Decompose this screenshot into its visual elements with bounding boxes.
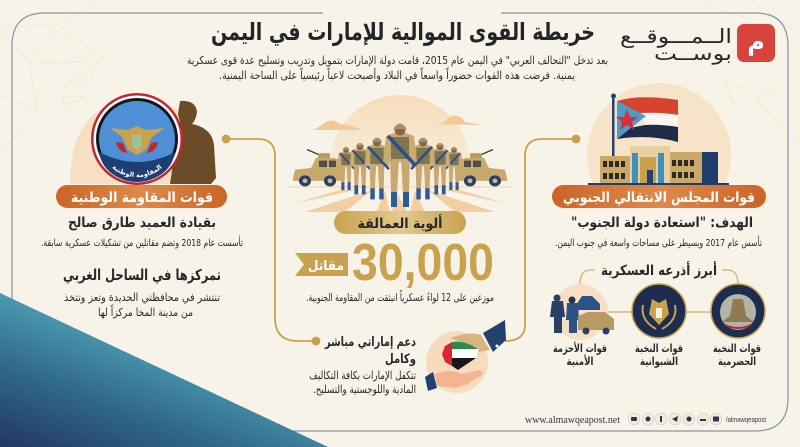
connector lines <box>222 136 580 344</box>
arms labels <box>553 341 761 368</box>
icon: hands with UAE flag <box>425 320 506 393</box>
UAE support text: تتكفل الإمارات بكافة التكاليف <box>309 369 416 382</box>
arms labels: الشبوانية <box>640 355 678 368</box>
emblem badge <box>91 93 183 185</box>
council text <box>555 215 762 249</box>
right illustration: flag and building <box>587 83 731 185</box>
arms labels: قوات النخبة <box>635 342 683 355</box>
logo: بوســت <box>654 43 732 65</box>
ribbon: fighters <box>295 253 348 276</box>
UAE support text: دعم إماراتي مباشر <box>324 335 416 350</box>
pill: national resistance forces <box>56 185 227 208</box>
UAE support text: وكامل <box>385 352 416 367</box>
logo: الــمـــوقــع <box>620 24 732 48</box>
national resistance text: بقيادة العميد طارق صالح <box>68 215 216 231</box>
council text: تأسس عام 2017 ويسيطر على مساحات واسعة في جنوب اليمن. <box>555 235 762 249</box>
UAE support text: المادية واللوجستية والتسليح. <box>313 383 416 396</box>
building <box>588 146 729 185</box>
emblem badge: المقاومة الوطنية <box>112 164 162 178</box>
arms labels: قوات الأحزمة <box>553 341 607 355</box>
intro text: يمنية. فرضت هذه القوات حضوراً واسعاً في البلاد وأصبحت لاعباً رئيسياً على الساحة اليمنية. <box>219 67 575 82</box>
footer handle: /almawqeapost <box>726 417 766 424</box>
logo <box>620 24 775 65</box>
title: خريطة القوى الموالية للإمارات في اليمن <box>211 18 595 46</box>
pill: giants brigades: ألوية العمالقة <box>358 214 442 232</box>
heading: main military arms: أبرز أذرعه العسكرية <box>601 261 717 279</box>
footer social icons <box>628 413 722 425</box>
flag <box>616 97 678 142</box>
footer website: www.almawqeapost.net <box>525 414 620 426</box>
national resistance text <box>41 215 243 319</box>
icon: security belt forces <box>550 284 614 340</box>
commander silhouette <box>170 101 216 184</box>
big number: 30,000 <box>352 234 494 292</box>
center illustration: soldiers and vehicles <box>288 95 512 213</box>
giants caption: موزعين على 12 لواءً عسكرياً انبثقت من المقاومة الجنوبية. <box>306 290 494 304</box>
badge: hadrami elite <box>711 284 765 338</box>
pill: southern transitional council <box>552 185 766 208</box>
arms labels: الحضرمية <box>718 355 756 368</box>
national resistance text: تنتشر في محافظتي الحديدة وتعز وتتخذ <box>64 291 220 304</box>
pill: giants brigades <box>334 211 466 234</box>
intro text: بعد تدخل "التحالف العربي" في اليمن عام 2015، قامت دولة الإمارات بتمويل وتدريب وتسليح عدة قوى عسكرية <box>187 54 608 67</box>
arms labels: قوات النخبة <box>713 342 761 355</box>
national resistance text: من مدينة المخا مركزاً لها <box>98 304 193 319</box>
logo: م <box>747 28 765 56</box>
national resistance text: تمركزها في الساحل الغربي <box>63 266 221 284</box>
council text: الهدف: "استعادة دولة الجنوب" <box>571 215 753 231</box>
left illustration: national resistance emblem <box>70 93 216 185</box>
UAE support text <box>309 335 416 396</box>
ribbon: fighters: مقاتل <box>308 259 344 274</box>
intro text <box>187 54 608 82</box>
badge: shabwani elite <box>632 284 686 338</box>
arms connector <box>580 270 740 312</box>
pill: southern transitional council: قوات المجلس الانتقالي الجنوبي <box>563 190 755 206</box>
arms labels: الأمنية <box>566 354 594 368</box>
pill: national resistance forces: قوات المقاومة الوطنية <box>71 190 213 206</box>
national resistance text: تأسست عام 2018 وتضم مقاتلين من تشكيلات عسكرية سابقة. <box>41 235 243 249</box>
corner triangle <box>0 293 328 447</box>
